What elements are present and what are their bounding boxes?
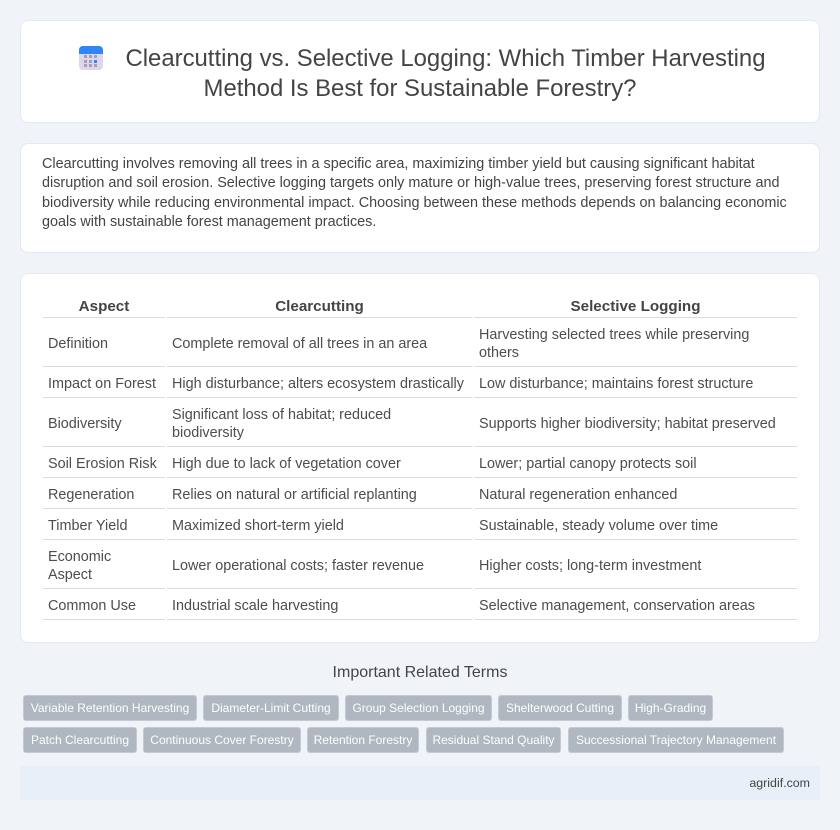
table header: Aspect: Aspect [79, 298, 129, 315]
tag [628, 695, 713, 721]
cell [172, 407, 391, 441]
cell: High due to lack of vegetation cover [172, 456, 401, 472]
title [125, 45, 766, 102]
cell: Selective management, conservation areas [479, 598, 755, 614]
row: Soil Erosion Risk: Soil Erosion Risk [48, 456, 157, 472]
row: Definition: Definition [48, 336, 108, 352]
cell: Maximized short-term yield [172, 518, 344, 534]
tag: Group Selection Logging [352, 701, 485, 715]
tag: Residual Stand Quality [432, 733, 555, 747]
title: Clearcutting vs. Selective Logging: Which Timber Harvesting [125, 45, 766, 72]
panel: introduction [20, 143, 820, 253]
row: Timber Yield: Timber Yield [48, 518, 127, 534]
tag: Retention Forestry [314, 733, 412, 747]
tag [426, 727, 561, 753]
row: Common Use: Common Use [48, 598, 136, 614]
tag [307, 727, 419, 753]
text block: introduction: biodiversity while reducing environmental impact. Choosing between these methods depends on balancing economic [42, 195, 787, 211]
cell: Relies on natural or artificial replanting [172, 487, 417, 503]
cell: Low disturbance; maintains forest structure [479, 376, 753, 392]
cell: Higher costs; long-term investment [479, 558, 701, 574]
text block: introduction: Clearcutting involves removing all trees in a specific area, maximizing timber yield but causing significant habitat [42, 156, 755, 172]
table header: Selective Logging: Selective Logging [571, 298, 700, 315]
row: Economic Aspect [48, 549, 111, 583]
row: Regeneration: Regeneration [48, 487, 134, 503]
cell: Complete removal of all trees in an area [172, 336, 427, 352]
cell: High disturbance; alters ecosystem drastically [172, 376, 464, 392]
tag [203, 695, 339, 721]
heading: Important Related Terms: Important Related Terms [333, 664, 507, 681]
tag [23, 727, 137, 753]
tag: Patch Clearcutting [31, 733, 129, 747]
tag: Continuous Cover Forestry [150, 733, 294, 747]
row: Impact on Forest: Impact on Forest [48, 376, 156, 392]
cell: Lower operational costs; faster revenue [172, 558, 424, 574]
text block: introduction [42, 156, 787, 230]
tag [143, 727, 301, 753]
text block: introduction: disruption and soil erosion. Selective logging targets only mature or high-value trees, preserving forest structure and [42, 175, 780, 191]
tag: Diameter-Limit Cutting [211, 701, 331, 715]
cell: others [479, 345, 519, 361]
cell [479, 327, 749, 361]
row: Biodiversity: Biodiversity [48, 416, 122, 432]
cell: Sustainable, steady volume over time [479, 518, 718, 534]
footer bar [20, 766, 820, 800]
icon: calendar [79, 46, 103, 70]
tag: Successional Trajectory Management [576, 733, 776, 747]
tag [568, 727, 784, 753]
tag: High-Grading [635, 701, 706, 715]
tag [23, 695, 197, 721]
tag list: related terms [23, 695, 784, 753]
tag: Shelterwood Cutting [506, 701, 614, 715]
panel: title card [20, 20, 820, 123]
row: Economic Aspect: Aspect [48, 567, 92, 583]
cell: biodiversity [172, 425, 244, 441]
cell: Natural regeneration enhanced [479, 487, 677, 503]
cell: Significant loss of habitat; reduced [172, 407, 391, 423]
tag [345, 695, 492, 721]
tag [498, 695, 622, 721]
cell: Supports higher biodiversity; habitat preserved [479, 416, 776, 432]
panel: comparison table [20, 273, 820, 643]
cell: Industrial scale harvesting [172, 598, 338, 614]
title: Method Is Best for Sustainable Forestry? [204, 75, 636, 102]
table header: Clearcutting: Clearcutting [275, 298, 364, 315]
cell: Harvesting selected trees while preserving [479, 327, 749, 343]
cell: Lower; partial canopy protects soil [479, 456, 697, 472]
text block: introduction: goals with sustainable forest management practices. [42, 214, 376, 230]
footer text: agridif.com: agridif.com [749, 776, 810, 790]
row: Economic Aspect: Economic [48, 549, 111, 565]
tag: Variable Retention Harvesting [31, 701, 189, 715]
